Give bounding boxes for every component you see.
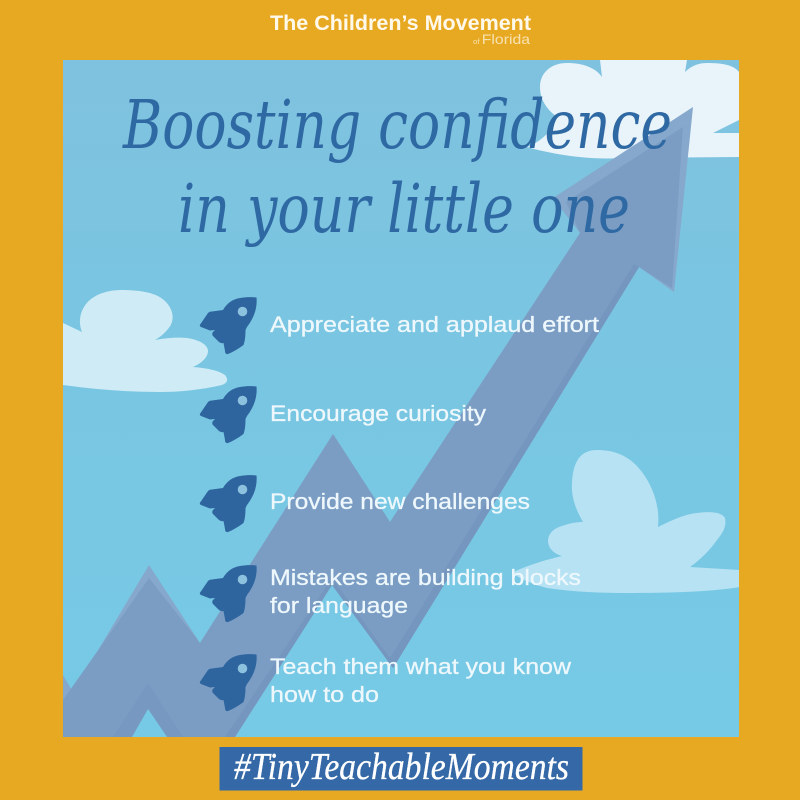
- title: in your little one: [178, 170, 630, 248]
- icon: rocket: [200, 475, 257, 532]
- organisation logo: [270, 12, 531, 47]
- cloud: right: [512, 450, 740, 593]
- title: [121, 86, 672, 248]
- tip: mistakes: [200, 565, 581, 622]
- tip: mistakes: for language: [270, 593, 408, 618]
- icon: rocket: [200, 297, 257, 354]
- tip: challenges: [200, 475, 530, 532]
- tip: appreciate effort: [200, 297, 600, 354]
- tip: mistakes: Mistakes are building blocks: [270, 565, 581, 590]
- tip: appreciate effort: Appreciate and applaud effort: [270, 312, 600, 337]
- icon: rocket: [200, 565, 257, 622]
- cloud: left: [63, 290, 227, 392]
- arrow: lower inner peak: [113, 683, 183, 737]
- icon: rocket: [200, 386, 257, 443]
- tip: curiosity: Encourage curiosity: [270, 401, 487, 426]
- tip: teach: how to do: [270, 682, 379, 707]
- arrow: rising zigzag chart line: [63, 107, 693, 737]
- panel: sky illustration: [63, 60, 740, 737]
- organisation logo: The Children’s Movement: [270, 12, 531, 35]
- title: Boosting confidence: [121, 86, 672, 164]
- icon: rocket: [200, 654, 257, 711]
- cloud: top right: [527, 60, 739, 158]
- hashtag banner: #TinyTeachableMoments: [234, 746, 569, 788]
- tip: teach: Teach them what you know: [270, 654, 572, 679]
- tip: teach: [200, 654, 572, 711]
- tip: challenges: Provide new challenges: [270, 489, 530, 514]
- tip: curiosity: [200, 386, 487, 443]
- organisation logo: of Florida: [473, 31, 530, 47]
